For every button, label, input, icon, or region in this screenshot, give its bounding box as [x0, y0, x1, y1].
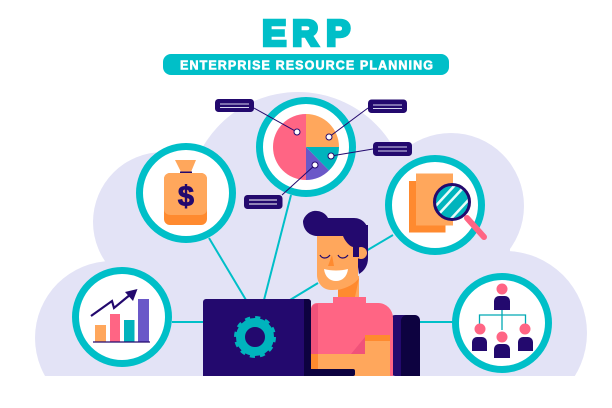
face [317, 236, 358, 290]
chair [390, 315, 420, 376]
panel: money bag: $ [178, 181, 194, 213]
subtitle banner [163, 54, 449, 75]
hair back [352, 225, 368, 274]
eyes [320, 255, 348, 258]
panel: org chart [456, 276, 548, 370]
panel: magnifier over documents [388, 158, 484, 252]
panel: growth chart [76, 270, 168, 364]
label: top left [215, 99, 254, 112]
laptop [203, 299, 355, 376]
subtitle banner: ENTERPRISE RESOURCE PLANNING [180, 58, 433, 72]
title: ERP: ERP [262, 12, 350, 53]
person [303, 211, 393, 376]
connector lines [172, 195, 454, 322]
shirt [311, 297, 393, 376]
label: bottom left [244, 195, 282, 209]
icon: gear [236, 318, 274, 356]
background cloud [35, 92, 587, 376]
pie callout dots [294, 129, 334, 168]
neck [338, 276, 359, 298]
nose [328, 255, 334, 266]
ear [355, 247, 367, 259]
pie callout lines [254, 108, 373, 195]
label: top right [368, 100, 407, 113]
forearm [311, 341, 390, 376]
hair [303, 211, 368, 257]
label: right [373, 142, 412, 156]
panel: money bag [140, 146, 232, 240]
panel: pie chart [260, 100, 352, 194]
mouth [324, 269, 348, 281]
